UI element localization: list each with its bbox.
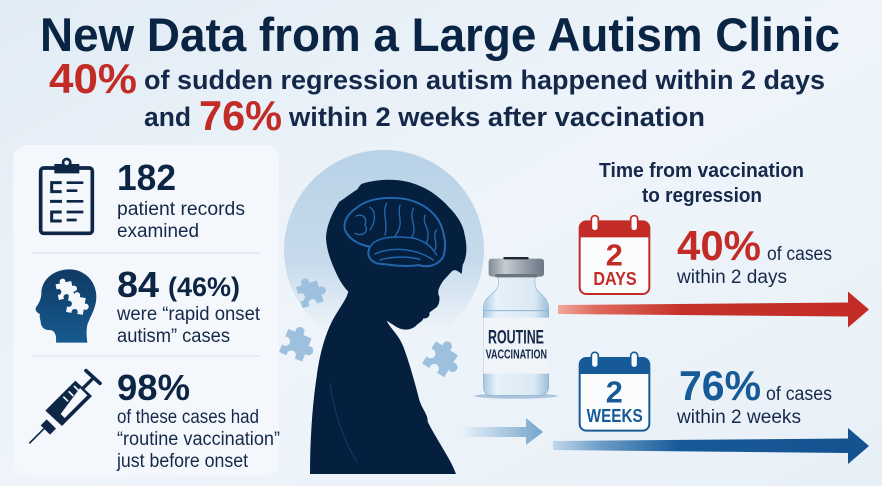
subtitle headline: of sudden regression autism happened within 2 days: [144, 65, 825, 95]
heading: time from vaccination: Time from vaccination: [599, 160, 804, 182]
vaccine vial: ROUTINE: [488, 327, 544, 348]
icon: head with puzzle pieces: [36, 269, 96, 343]
heading: time from vaccination: to regression: [642, 185, 762, 207]
brain outline: [344, 198, 445, 266]
arrow: blue: [553, 428, 869, 464]
stat: 40% within 2 days: of cases: [767, 244, 832, 265]
vaccine vial: [474, 257, 558, 399]
stat: 182 patient records: [117, 157, 245, 242]
vaccine vial: VACCINATION: [486, 347, 547, 362]
puzzle pieces: [279, 273, 467, 381]
arrow: red: [558, 292, 869, 328]
halo behind child: [284, 150, 484, 350]
icon: calendar 2 days: [580, 216, 649, 294]
child silhouette with brain: [310, 180, 466, 474]
heading: time from vaccination: [599, 160, 804, 207]
subtitle headline: within 2 weeks after vaccination: [288, 102, 705, 132]
stat: 84 rapid onset: [116, 264, 261, 347]
stat: 182 patient records: examined: [117, 221, 199, 242]
title: New Data from a Large Autism Clinic: [40, 8, 840, 61]
stat: 98% routine vaccination: “routine vaccination”: [117, 429, 280, 450]
stat: 76% within 2 weeks: within 2 weeks: [676, 407, 801, 428]
stat: 98% routine vaccination: [116, 367, 280, 472]
stat: 40% within 2 days: within 2 days: [676, 267, 787, 288]
stat: 76% within 2 weeks: [676, 362, 832, 428]
subtitle headline: [49, 55, 825, 139]
icon: syringe: [29, 371, 100, 443]
stat: 98% routine vaccination: just before onset: [116, 451, 249, 472]
stat: 40% within 2 days: 40%: [677, 222, 761, 269]
stat: 84 rapid onset: (46%): [168, 272, 240, 302]
icon: calendar 2 days: 2: [606, 239, 623, 273]
stat: 76% within 2 weeks: of cases: [766, 384, 832, 405]
panel: key statistics: [13, 145, 280, 476]
icon: calendar 2 days: DAYS: [593, 268, 637, 289]
stat: 182 patient records: patient records: [117, 199, 245, 220]
icon: calendar 2 weeks: [580, 352, 649, 431]
arrow: vaccination to child: [463, 418, 543, 445]
stat: 182 patient records: 182: [117, 157, 176, 198]
subtitle headline: 40%: [49, 55, 137, 102]
icon: calendar 2 weeks: 2: [606, 375, 623, 409]
icon: calendar 2 weeks: WEEKS: [587, 405, 643, 426]
stat: 98% routine vaccination: 98%: [117, 367, 190, 408]
subtitle headline: 76%: [199, 92, 282, 139]
stat: 40% within 2 days: [676, 222, 832, 288]
stat: 84 rapid onset: autism” cases: [117, 326, 230, 347]
icon: clipboard: [41, 159, 92, 233]
stat: 98% routine vaccination: of these cases had: [117, 407, 259, 428]
stat: 84 rapid onset: 84: [117, 264, 159, 305]
stat: 76% within 2 weeks: 76%: [679, 362, 761, 409]
stat: 84 rapid onset: were “rapid onset: [116, 304, 261, 325]
subtitle headline: and: [144, 102, 191, 132]
